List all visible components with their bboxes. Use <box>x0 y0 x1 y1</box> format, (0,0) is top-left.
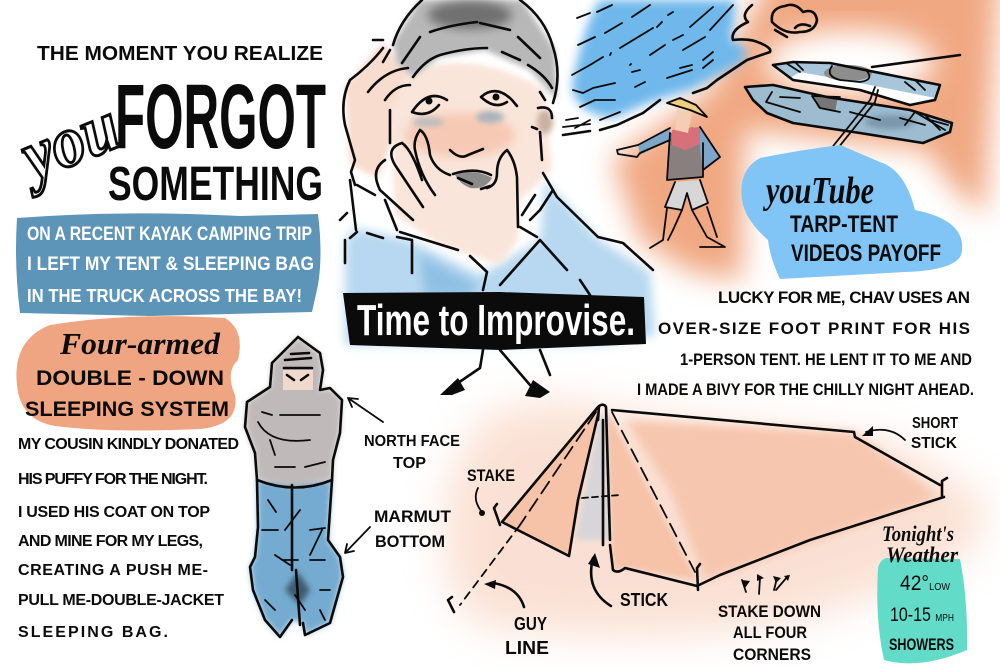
arrow <box>591 558 611 606</box>
intro text: ON A RECENT KAYAK CAMPING TRIP <box>27 224 312 245</box>
text block: puffy story: I USED HIS COAT ON TOP <box>18 504 210 521</box>
nose <box>450 149 483 157</box>
jacket <box>245 337 342 487</box>
label: stake down all four corners: ALL FOUR <box>733 623 807 642</box>
illustration: man with hat <box>617 98 725 248</box>
heading: sleeping system: SLEEPING SYSTEM <box>25 398 229 421</box>
label: stick: STICK <box>620 590 668 610</box>
cap outline <box>393 0 558 103</box>
banner: time to improvise <box>343 292 646 350</box>
label: north face top: TOP <box>393 455 426 472</box>
rain: SHOWERS <box>889 635 954 654</box>
arrow <box>345 527 370 553</box>
intro text: IN THE TRUCK ACROSS THE BAY! <box>27 286 302 306</box>
label: stake down all four corners: STAKE DOWN <box>718 602 821 621</box>
temperature: 42°LOW <box>900 572 951 595</box>
raised hand skin <box>345 42 408 178</box>
illustration: man's legs <box>440 350 550 398</box>
text block: puffy story: PULL ME-DOUBLE-JACKET <box>18 592 224 609</box>
illustration: tarp tent <box>448 405 947 612</box>
illustration: kayaks <box>745 55 960 170</box>
right shoe <box>525 380 550 398</box>
illustration: water waves <box>563 5 770 135</box>
label: short stick <box>862 415 958 452</box>
text block: puffy story: HIS PUFFY FOR THE NIGHT. <box>18 471 208 488</box>
background wash: blue water <box>572 0 746 118</box>
face <box>283 370 313 390</box>
illustration: cloud <box>772 5 817 37</box>
illustration: sleeping figure <box>245 337 343 637</box>
shorts <box>665 180 708 210</box>
under-eye shadow <box>476 111 504 123</box>
title: the moment you realize: THE MOMENT YOU REALIZE <box>37 43 323 65</box>
label: guy line: GUY <box>514 614 547 634</box>
hat <box>667 98 707 117</box>
label: stake <box>467 466 515 516</box>
banner text: Time to Improvise. <box>357 296 635 345</box>
heading: videos payoff: VIDEOS PAYOFF <box>791 240 941 267</box>
heading: tarp-tent: TARP-TENT <box>790 211 898 238</box>
heading: weather: Weather <box>886 542 958 567</box>
text block: chav's footprint: LUCKY FOR ME, CHAV USES AN <box>718 288 970 307</box>
tent body left <box>503 408 598 555</box>
panel: trip intro <box>16 213 320 316</box>
mouth <box>455 172 492 188</box>
text block: puffy story: AND MINE FOR MY LEGS, <box>18 533 203 550</box>
label: marmut bottom: BOTTOM <box>375 532 445 551</box>
chin hand <box>376 130 450 230</box>
label: marmut bottom: MARMUT <box>374 507 452 526</box>
arrow <box>866 430 905 440</box>
raised hand <box>343 40 410 195</box>
upper kayak <box>773 62 940 105</box>
label: north face top: NORTH FACE <box>364 433 460 450</box>
stakes <box>448 478 947 612</box>
man outline <box>617 98 725 248</box>
text block: puffy story: CREATING A PUSH ME- <box>18 562 208 579</box>
label: short stick: STICK <box>911 435 957 452</box>
eyes <box>412 91 517 114</box>
heading: tonight's: Tonight's <box>882 521 954 546</box>
paddle shaft on upper kayak <box>872 55 960 67</box>
label: stake down all four corners: CORNERS <box>733 645 811 664</box>
label: stick <box>588 553 668 610</box>
background wash: tent ground <box>444 402 985 636</box>
lower kayak <box>745 85 952 143</box>
blue legs <box>250 480 343 637</box>
door shadow <box>575 410 610 540</box>
text block: chav's footprint <box>637 288 974 399</box>
text block: chav's footprint: OVER-SIZE FOOT PRINT FOR HIS <box>658 319 970 338</box>
shirt lines <box>340 180 590 295</box>
panel: tonight's weather <box>877 521 967 663</box>
tent body right <box>625 420 940 580</box>
label: marmut bottom <box>345 507 452 553</box>
arrow <box>476 488 482 512</box>
label: stake: STAKE <box>467 466 515 485</box>
background wash: orange beach <box>612 0 1000 280</box>
panel: youtube blob <box>741 145 962 279</box>
arrow <box>493 583 524 607</box>
illustration: surprised man <box>340 0 655 345</box>
text block: puffy story: SLEEPING BAG. <box>18 624 168 641</box>
arms <box>638 128 670 155</box>
label: north face top <box>348 398 460 472</box>
cap <box>393 0 557 100</box>
vest <box>667 127 703 180</box>
left shoe <box>440 378 465 395</box>
label: guy line <box>484 580 549 658</box>
label: guy line: LINE <box>505 638 549 658</box>
face <box>675 110 692 133</box>
title: you: you <box>3 85 130 198</box>
shirt <box>345 180 655 345</box>
intro text <box>27 224 314 306</box>
tent outline <box>502 407 598 556</box>
wind: 10-15 MPH <box>890 605 954 626</box>
arrows <box>742 576 788 594</box>
cheek <box>405 113 515 157</box>
paddle <box>826 87 878 158</box>
figure outline <box>245 337 343 637</box>
text block: puffy story: MY COUSIN KINDLY DONATED <box>18 436 239 453</box>
heading: double-down: DOUBLE - DOWN <box>36 367 224 390</box>
side of face <box>532 92 552 160</box>
arrow <box>348 398 383 422</box>
heading: four-armed: Four-armed <box>59 326 221 361</box>
ear <box>537 110 553 134</box>
title: something: SOMETHING <box>108 158 323 211</box>
panel: sleeping system heading <box>16 316 240 430</box>
text block: puffy story <box>18 436 239 641</box>
face skin <box>390 63 552 265</box>
heading: youtube: youTube <box>763 170 874 212</box>
label: stake down all four corners <box>718 574 821 664</box>
title: forgot: FORGOT <box>115 66 326 168</box>
shirt shadow <box>420 255 478 296</box>
label: short stick: SHORT <box>912 415 958 432</box>
intro text: I LEFT MY TENT & SLEEPING BAG <box>27 254 314 275</box>
